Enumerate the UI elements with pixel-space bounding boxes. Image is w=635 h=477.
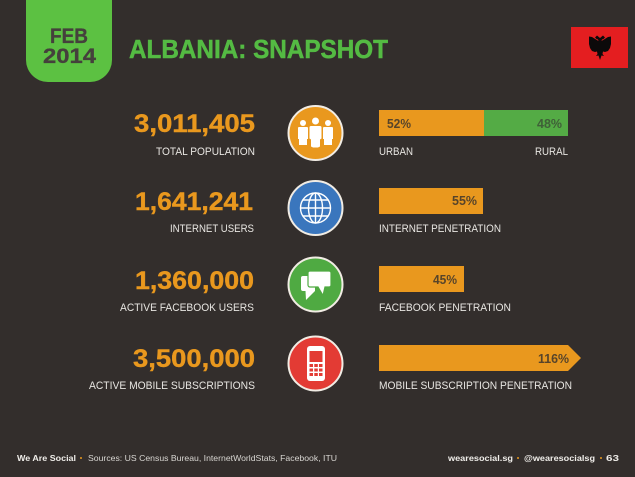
mobile penetration arrow bar	[379, 345, 581, 371]
icon: Albanian flag	[571, 27, 628, 68]
row: internet users	[135, 181, 501, 235]
footer site: wearesocial.sg	[447, 453, 513, 463]
row: facebook users	[120, 258, 511, 314]
footer	[17, 453, 619, 463]
urban rural bar: 52%	[387, 117, 411, 131]
date tab	[26, 0, 112, 82]
mobile penetration label: MOBILE SUBSCRIPTION PENETRATION	[379, 380, 572, 392]
internet users figure: 1,641,241	[135, 188, 253, 216]
icon: globe	[288, 181, 342, 235]
row: mobile subscriptions	[89, 336, 581, 392]
footer handle: @wearesocialsg	[524, 453, 595, 463]
urban rural bar: 48%	[537, 117, 562, 131]
icon: people	[288, 106, 342, 160]
internet penetration bar: 55%	[452, 194, 477, 208]
mobile subscriptions label: ACTIVE MOBILE SUBSCRIPTIONS	[89, 380, 255, 392]
facebook penetration bar	[379, 266, 464, 292]
icon: mobile phone	[288, 336, 342, 390]
page number: 63	[606, 453, 619, 463]
facebook users figure: 1,360,000	[135, 267, 254, 295]
internet users label: INTERNET USERS	[170, 223, 254, 235]
population figure: 3,011,405	[134, 110, 255, 138]
footer credit: We Are Social	[17, 453, 76, 463]
urban rural bar	[379, 110, 568, 136]
rural label: RURAL	[535, 146, 568, 158]
date tab: FEB	[50, 25, 88, 48]
date tab: 2014	[43, 45, 96, 68]
population label: TOTAL POPULATION	[156, 146, 255, 158]
icon: speech bubbles	[288, 258, 342, 312]
facebook penetration bar: 45%	[433, 273, 457, 287]
internet penetration bar	[379, 188, 483, 214]
mobile penetration arrow bar: 116%	[538, 352, 569, 366]
title: ALBANIA: SNAPSHOT	[129, 34, 388, 64]
footer sources: Sources: US Census Bureau, InternetWorldStats, Facebook, ITU	[88, 453, 337, 463]
internet penetration label: INTERNET PENETRATION	[379, 223, 501, 235]
urban label: URBAN	[379, 146, 413, 158]
facebook users label: ACTIVE FACEBOOK USERS	[120, 302, 254, 314]
row: total population	[134, 106, 568, 160]
facebook penetration label: FACEBOOK PENETRATION	[379, 302, 511, 314]
mobile subscriptions figure: 3,500,000	[133, 345, 255, 373]
